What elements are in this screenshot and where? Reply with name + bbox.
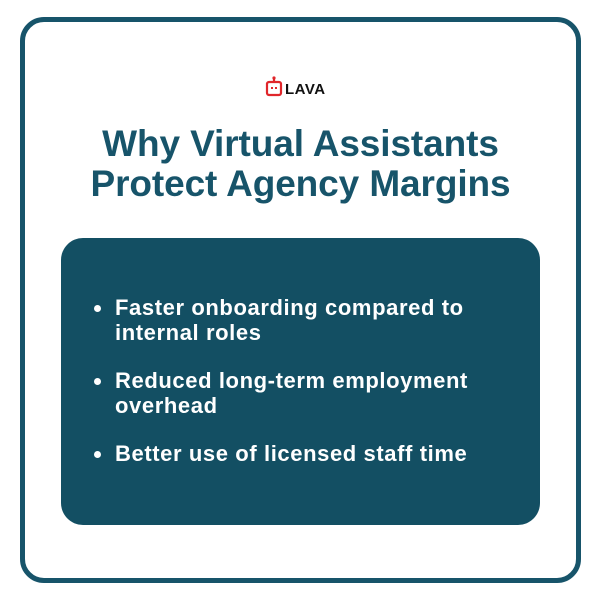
title: [90, 123, 510, 204]
logo: [266, 76, 326, 98]
title: Protect Agency Margins: [90, 163, 510, 204]
panel: benefits: Reduced long-term employment overhead: [115, 368, 468, 418]
title: Why Virtual Assistants: [102, 123, 499, 164]
panel: benefits: [61, 238, 540, 525]
panel: benefits: Faster onboarding compared to internal roles: [115, 295, 464, 345]
icon: robot: [267, 78, 281, 95]
panel: benefits: Better use of licensed staff time: [115, 441, 467, 466]
logo: LAVA: [285, 81, 326, 98]
